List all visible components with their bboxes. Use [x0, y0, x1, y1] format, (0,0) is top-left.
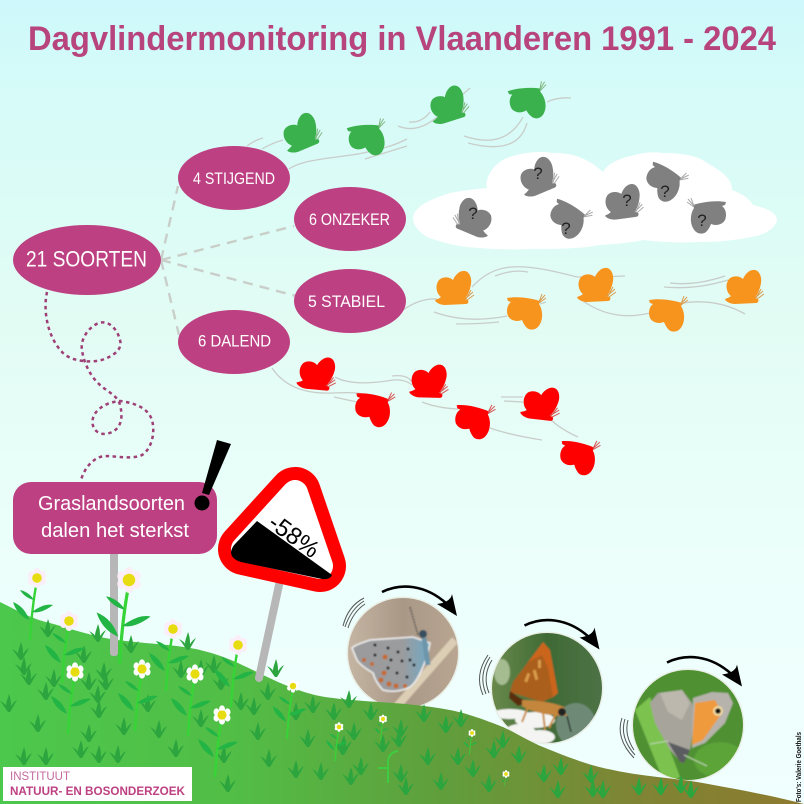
ellipse: 5 stabiel	[294, 269, 406, 333]
ellipse: 4 stijgend: 4 STIJGEND	[193, 169, 275, 188]
photo: icarusblauwtje	[345, 595, 460, 712]
photo: hooibeestje	[630, 668, 746, 785]
group: 6 onzeker butterflies: ?	[622, 191, 632, 210]
title: Dagvlindermonitoring in Vlaanderen 1991 - 2024	[28, 20, 776, 58]
ellipse: 6 dalend: 6 DALEND	[198, 332, 271, 350]
group: 6 onzeker butterflies	[449, 154, 726, 244]
logo: NATUUR- EN BOSONDERZOEK	[10, 784, 185, 798]
cloud	[413, 152, 777, 249]
arrow: rolling 1	[382, 587, 457, 616]
post: grassland sign	[110, 550, 118, 656]
trails: red	[272, 368, 578, 440]
warning sign: -58%: -58%	[263, 509, 324, 564]
dotted connector	[46, 292, 153, 480]
dashed branches	[161, 186, 296, 335]
group: 6 onzeker butterflies: ?	[468, 204, 478, 223]
group: 5 stabiel butterflies	[435, 268, 764, 332]
ellipse: 5 stabiel: 5 STABIEL	[308, 292, 385, 311]
sign: graslandsoorten: dalen het sterkst	[41, 520, 189, 542]
warning sign: -58%	[231, 493, 332, 579]
group: 6 onzeker butterflies: ?	[660, 182, 670, 201]
photo credit: Foto's: Valerie Goethals	[796, 732, 803, 802]
ellipse: 6 onzeker: 6 ONZEKER	[309, 210, 390, 229]
trails: green	[247, 88, 571, 169]
hill	[0, 602, 804, 804]
ellipse: 21 soorten	[13, 225, 161, 295]
group: 6 onzeker butterflies: ?	[533, 164, 543, 183]
logo	[3, 767, 192, 801]
motion lines	[343, 598, 635, 758]
grass tufts	[0, 619, 699, 798]
group: 6 onzeker butterflies: ?	[561, 219, 571, 238]
icon: exclamation mark	[194, 440, 231, 510]
trails: orange	[403, 267, 745, 324]
ellipse: 6 onzeker	[294, 187, 406, 251]
arrows and motion lines	[343, 587, 742, 758]
flowers	[13, 567, 509, 786]
sign: graslandsoorten	[13, 482, 217, 554]
logo: INSTITUUT	[10, 769, 71, 783]
ellipse: 6 dalend	[178, 310, 290, 374]
arrow: rolling 2	[524, 620, 600, 650]
sign: graslandsoorten: Graslandsoorten	[38, 493, 185, 515]
ellipse: 21 soorten: 21 SOORTEN	[26, 246, 147, 272]
post: warning sign	[259, 585, 279, 678]
photo: dikkopje	[490, 630, 605, 747]
group: 6 dalend butterflies	[296, 354, 601, 477]
ellipse: 4 stijgend	[178, 146, 290, 210]
group: 6 onzeker butterflies: ?	[697, 211, 707, 230]
group: 4 stijgend butterflies	[277, 81, 552, 160]
arrow: rolling 3	[667, 657, 742, 686]
